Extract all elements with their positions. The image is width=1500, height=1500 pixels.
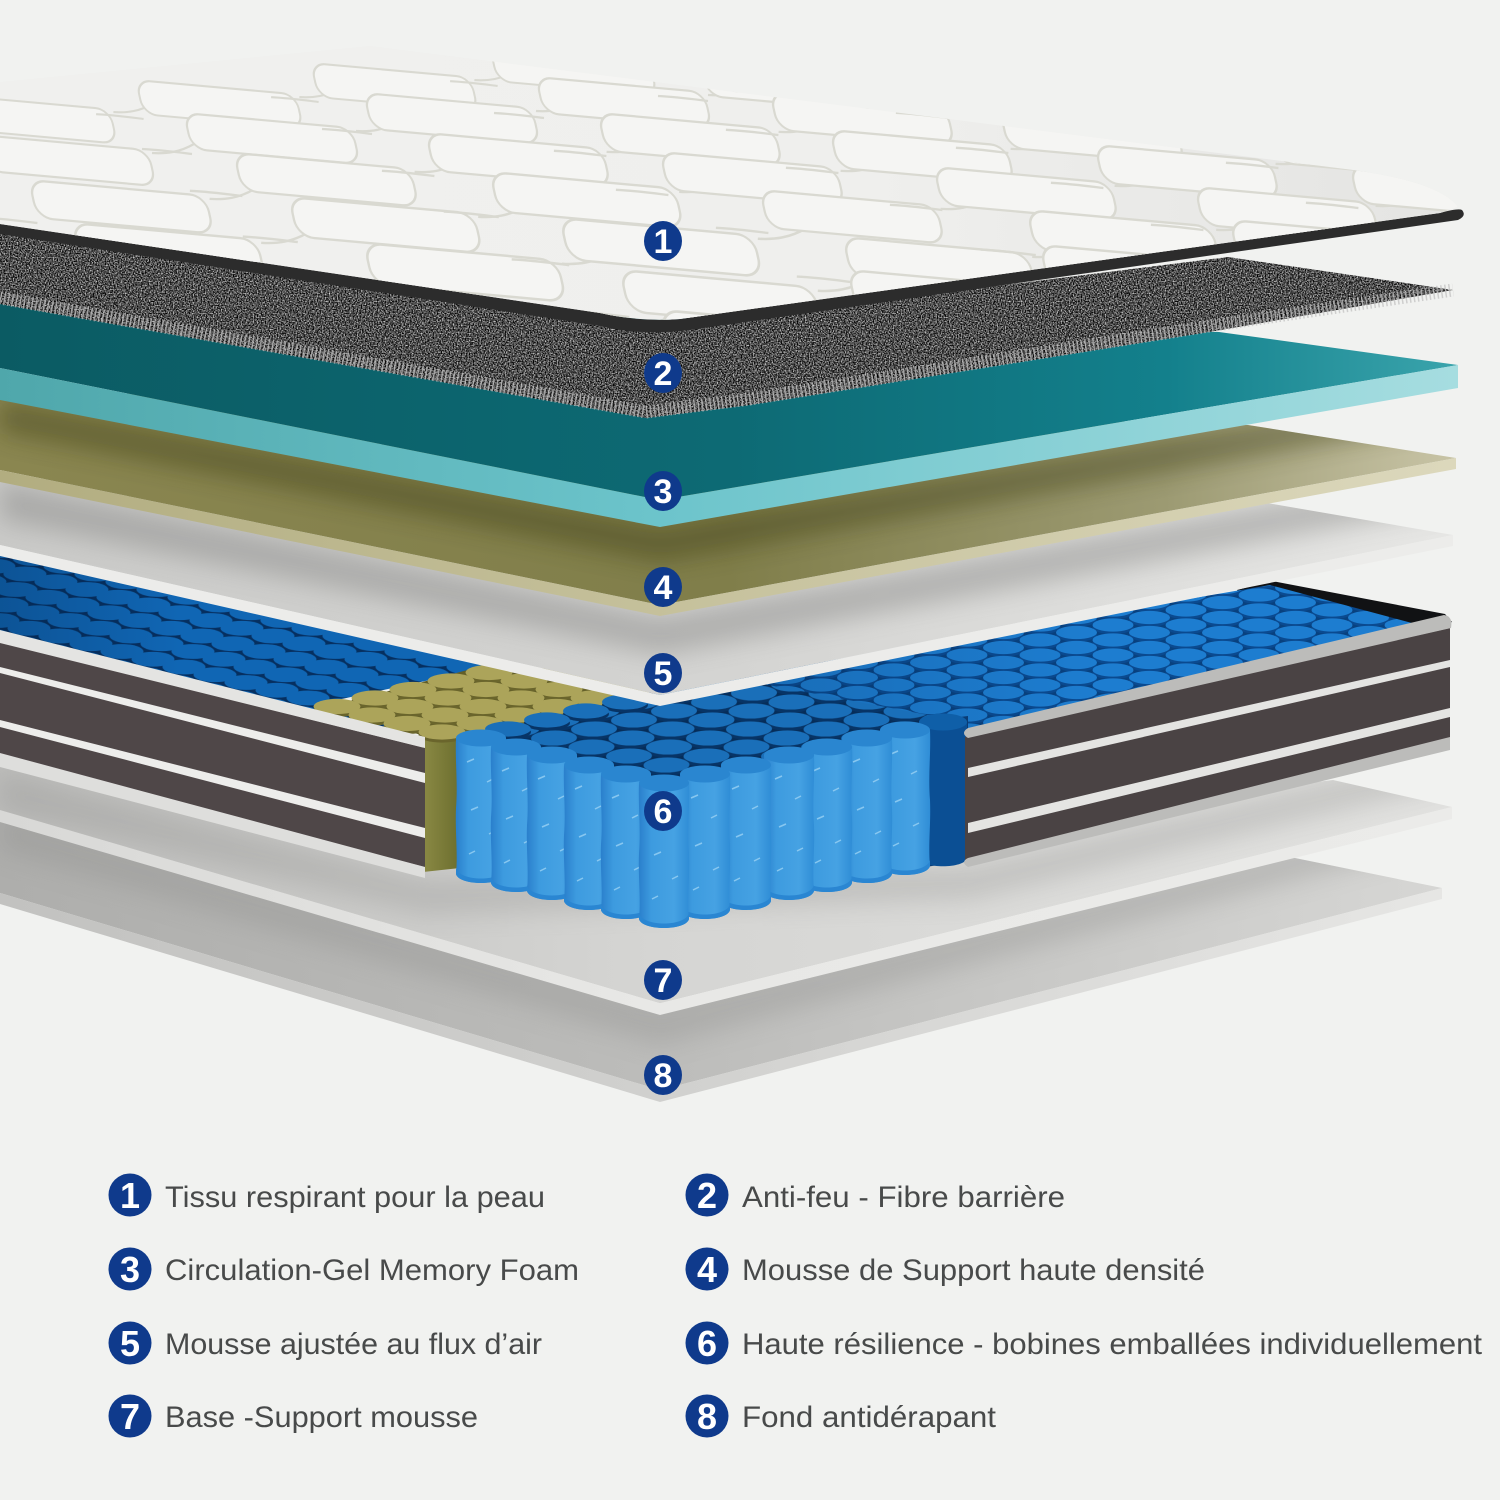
legend item 2: 2 [697,1175,717,1216]
layer 8: non-slip base [0,800,1452,1102]
legend item 7 [108,1394,478,1438]
legend item 3 [108,1248,579,1290]
legend item 7: 7 [120,1396,140,1437]
badge 4 [644,567,682,607]
layer 2: fire barrier fibre [0,228,1453,418]
spring tops: right block [600,585,1423,735]
layer 7: support foam base [0,750,1452,1015]
badge 6: 6 [654,793,672,831]
badge 6 [644,791,682,831]
badge 4: 4 [654,569,673,607]
legend item 4: Mousse de Support haute densité [742,1254,1205,1287]
legend item 1 [108,1174,545,1216]
spring tops: left block [0,550,500,745]
rim [0,209,1464,332]
legend item 6 [686,1322,1483,1364]
legend item 3: Circulation-Gel Memory Foam [165,1254,579,1287]
legend item 4 [686,1248,1205,1290]
legend item 4: 4 [697,1249,717,1290]
badge 2: 2 [654,355,672,393]
legend item 6: Haute résilience - bobines emballées individuellement [742,1328,1483,1361]
legend item 2 [686,1174,1065,1216]
legend item 2: Anti-feu - Fibre barrière [742,1181,1065,1214]
legend item 8: 8 [697,1396,717,1437]
legend item 8: Fond antidérapant [742,1401,997,1434]
badge 8: 8 [654,1057,672,1095]
right fabric border [964,615,1451,867]
central spring tops [469,672,965,790]
olive spring tops [314,665,656,743]
dark recess [920,716,968,868]
badge 7 [644,960,682,1000]
olive base under tops [332,664,640,742]
quilting cells [0,47,1500,371]
legend item 5 [108,1322,542,1364]
layer 4: high density support foam [0,388,1458,616]
legend item 5: Mousse ajustée au flux d’air [165,1328,542,1361]
badge 5: 5 [654,655,672,693]
quilted top surface [0,46,1458,320]
layer 5: airflow foam [0,469,1456,706]
badge 3 [644,471,682,511]
legend item 5: 5 [120,1323,140,1364]
badge 7: 7 [654,962,672,1000]
olive support column [423,732,460,872]
layer 6: pocket springs [0,550,1452,928]
badge 5 [644,653,682,693]
legend item 3: 3 [120,1249,140,1290]
badge 1 [644,221,682,261]
layer 1: breathable quilted cover [0,62,1464,332]
badge 1: 1 [654,223,672,261]
legend item 1: Tissu respirant pour la peau [165,1181,545,1214]
legend item 1: 1 [120,1175,140,1216]
badge 3: 3 [654,473,672,511]
legend item 8 [686,1394,997,1438]
layer 3: gel memory foam [0,300,1458,527]
badge 8 [644,1055,682,1095]
edge spring tops [485,694,648,740]
back rim of spring unit [1237,581,1452,632]
legend item 7: Base -Support mousse [165,1401,478,1434]
left fabric border [0,630,425,878]
legend [108,1174,1483,1438]
diagram badges [644,221,682,1095]
badge 2 [644,353,682,393]
spring cylinders [456,714,967,928]
legend item 6: 6 [697,1323,717,1364]
